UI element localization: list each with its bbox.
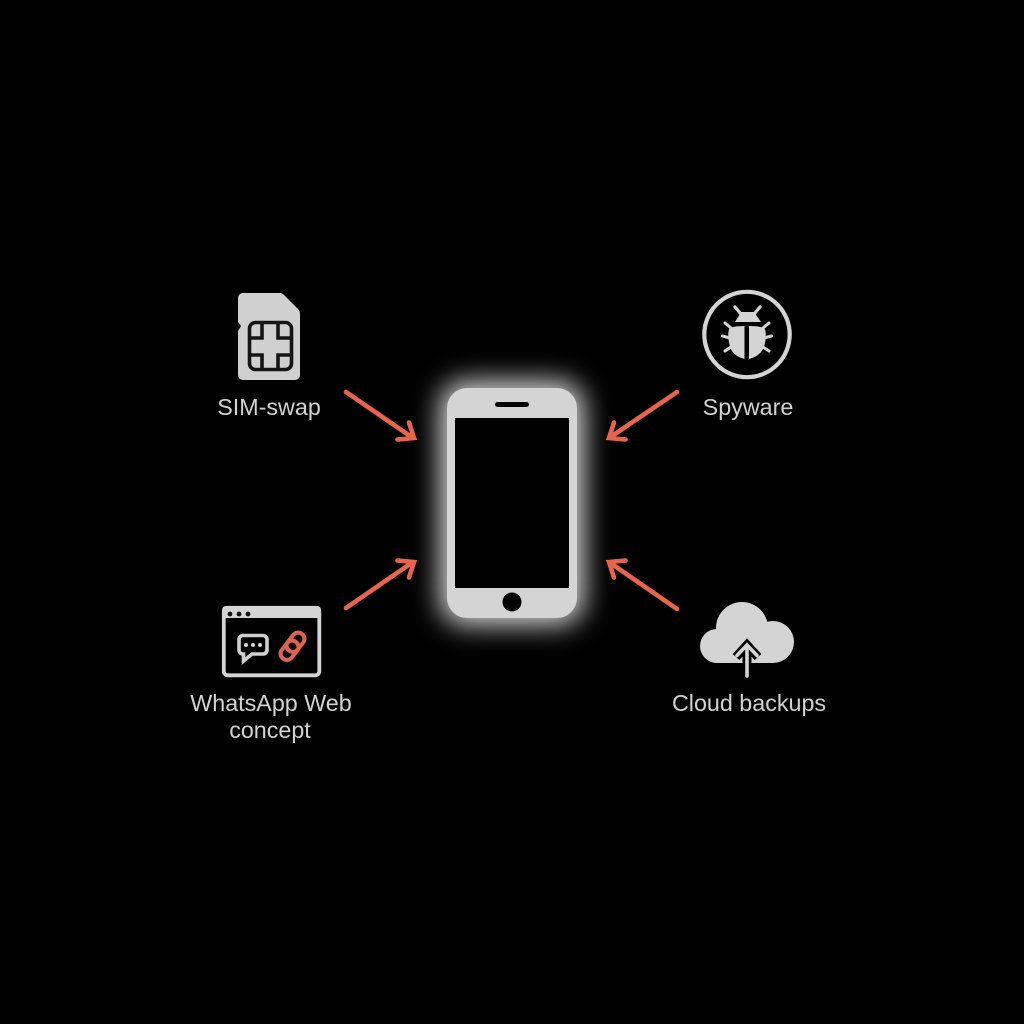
label: Spyware: Spyware (703, 394, 793, 420)
label: SIM-swap: SIM-swap (217, 394, 321, 420)
label: WhatsApp Web concept: WhatsApp Web (190, 690, 352, 716)
arrow: Cloud backups to phone (609, 560, 677, 609)
arrow: SIM-swap to phone (346, 392, 414, 440)
icon: spyware bug (704, 292, 790, 377)
label: WhatsApp Web concept (190, 690, 352, 743)
icon: chain link (278, 630, 307, 662)
arrow: WhatsApp Web to phone (346, 560, 414, 608)
icon: WhatsApp Web browser window (222, 606, 321, 675)
arrow: Spyware to phone (609, 392, 677, 440)
label: Cloud backups: Cloud backups (672, 690, 826, 716)
central phone with glow (441, 382, 583, 624)
icon: SIM card (238, 293, 300, 380)
icon: cloud upload (700, 602, 794, 680)
icon: chat bubble (239, 636, 267, 661)
label: WhatsApp Web concept: concept (229, 717, 311, 743)
